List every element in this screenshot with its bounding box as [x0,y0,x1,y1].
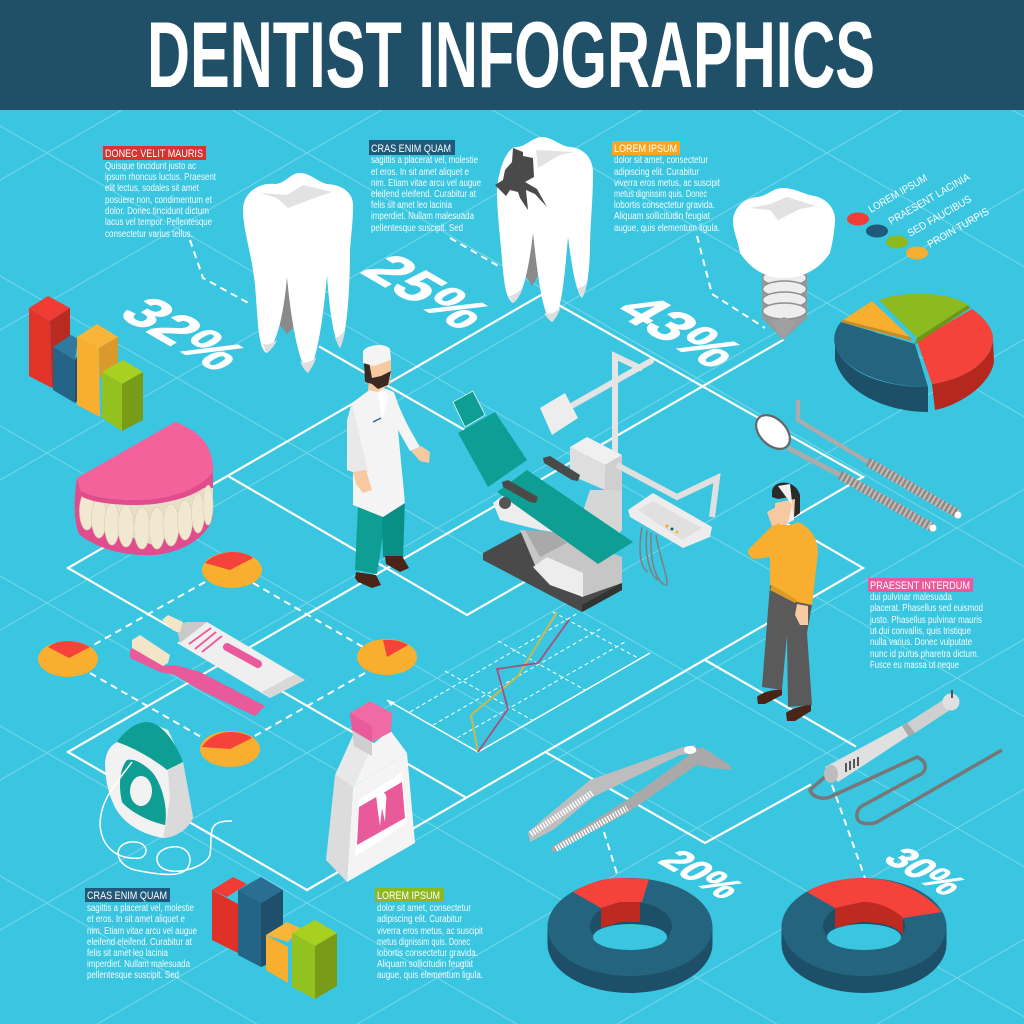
icon: dental chair [453,356,717,612]
text block: cras enim quam top: CRAS ENIM QUAM [371,143,451,155]
flowchart connector lines [68,295,863,890]
text block: donec velit mauris: DONEC VELIT MAURIS [105,148,203,160]
text block: donec velit mauris: Quisque tincidunt justo ac [105,161,196,172]
text block: lorem ipsum bottom: augue, quis elementum ligula. [377,970,483,981]
text block: donec velit mauris: lacus vel tempor. Pellentesque [105,217,212,228]
chart: bottom bars [212,877,337,999]
text block: lorem ipsum bottom: dolor sit amet, consectetur [377,903,472,914]
text block: praesent interdum: PRAESENT INTERDUM [870,580,970,592]
icon: dental floss [100,722,232,874]
text block: lorem ipsum bottom: LOREM IPSUM [377,890,440,902]
text block: cras enim quam top: imperdiet. Nullam malesuada [371,211,474,222]
lamp arm [573,356,651,455]
text block: lorem ipsum top: augue, quis elementum ligula. [614,223,720,234]
icon: toothpaste tube [162,615,305,698]
legend: pie chart keys: PRAESENT LACINIA [886,171,972,228]
text block: cras enim quam bottom: pellentesque suscipit. Sed [87,970,179,981]
icon: small pie top [202,552,262,588]
text block: cras enim quam top: sagittis a placerat vel, molestie [371,155,478,166]
icon: small pie bottom [200,731,260,767]
text block: cras enim quam top: pellentesque suscipit. Sed [371,223,463,234]
text block: lorem ipsum bottom: Aliquam sollicitudin feugiat [377,959,473,970]
legend: pie chart keys: PROIN TURPIS [926,206,991,251]
text block: lorem ipsum bottom [375,888,483,981]
text block: lorem ipsum bottom: metus dignissim quis. Donec [377,937,470,948]
chart: donut 30% [782,878,946,993]
text block: praesent interdum [868,578,983,671]
text block: cras enim quam bottom: eleifend eleifend. Curabitur at [87,937,192,948]
text block: lorem ipsum top [612,141,720,234]
stat: 43%: 43% [602,286,757,376]
icon: mouthwash bottle [326,701,415,882]
text block: lorem ipsum bottom: viverra eros metus, ac suscipit [377,926,483,937]
text block: praesent interdum: ut dui convallis, quis tristique [870,626,971,637]
dashed leader lines [90,236,865,878]
text block: cras enim quam bottom: CRAS ENIM QUAM [87,890,167,902]
icon: dental implant [733,188,835,340]
text block: praesent interdum: placerat. Phasellus sed euismod [870,603,983,614]
icon: dentist [347,345,430,588]
text block: cras enim quam top: nim. Etiam vitae arcu vel augue [371,178,481,189]
legend: pie chart keys [847,171,991,260]
text block: praesent interdum: Fusce eu massa ut neque [870,660,959,671]
icon: toothbrush [130,635,265,716]
text block: donec velit mauris: posuere non, condimentum et [105,195,212,206]
stat: 25%: 25% [348,246,505,338]
legend: pie chart keys: SED FAUCIBUS [906,193,974,240]
text block: cras enim quam top: eleifend eleifend. Curabitur at [371,189,476,200]
text block: cras enim quam bottom: sagittis a placerat vel, molestie [87,903,194,914]
text block: lorem ipsum bottom: lobortis consectetur gravida. [377,948,478,959]
chart: top left bars [29,296,143,431]
icon: dental probe [798,400,962,518]
chart: 3D pie [834,294,994,412]
text block: donec velit mauris: consectetur varius tellus. [105,229,193,240]
text block: praesent interdum: dui pulvinar malesuada [870,592,952,603]
text block: lorem ipsum top: lobortis consectetur gravida. [614,200,715,211]
text block: cras enim quam top [369,140,481,234]
text block: cras enim quam top: felis sit amet leo lacinia [371,200,452,211]
chart: small isometric line chart [387,612,650,752]
icon: extraction forceps [528,745,732,853]
text block: cras enim quam bottom: felis sit amet leo lacinia [87,948,168,959]
stat: 20%: 20% [649,844,753,905]
text block: lorem ipsum top: adipiscing elit. Curabitur [614,167,700,178]
text block: praesent interdum: nunc id purus pharetra dictum. [870,649,979,660]
text block: praesent interdum: justo. Phasellus pulvinar mauris [869,615,982,626]
icon: healthy tooth [243,173,353,373]
text block: lorem ipsum top: metus dignissim quis. Donec [614,189,707,200]
text block: donec velit mauris: elit lectus, sodales sit amet [105,183,199,194]
icon: small pie left [38,641,98,677]
text block: cras enim quam bottom: nim. Etiam vitae arcu vel augue [87,926,197,937]
text block: donec velit mauris [103,146,216,240]
text block: cras enim quam top: et eros. In sit amet aliquet e [371,167,469,178]
chart: donut 20% [548,878,712,993]
text block: lorem ipsum top: dolor sit amet, consectetur [614,155,709,166]
stat: 30%: 30% [874,842,976,901]
text block: lorem ipsum top: LOREM IPSUM [614,143,677,155]
text block: lorem ipsum bottom: adipiscing elit. Curabitur [377,914,463,925]
header band [0,0,1024,110]
icon: dentures [75,422,213,555]
instrument tray [617,465,717,586]
icon: patient with toothache [748,483,818,721]
text block: cras enim quam bottom [85,888,197,981]
lamp head [540,393,578,435]
icon: dental handpiece [810,690,1002,824]
icon: decayed tooth [495,137,593,322]
text block: cras enim quam bottom: imperdiet. Nullam malesuada [87,959,190,970]
instrument tower [570,437,622,545]
chair base [483,532,622,612]
icon: dental mirror [750,409,936,532]
icon: small pie right [357,639,417,675]
text block: lorem ipsum top: Aliquam sollicitudin feugiat [614,211,710,222]
text block: donec velit mauris: ipsum rhoncus luctus. Praesent [105,172,216,183]
text block: cras enim quam bottom: et eros. In sit amet aliquet e [87,914,185,925]
text block: donec velit mauris: dolor. Donec tincidunt dictum [105,206,209,217]
text block: praesent interdum: nulla varius. Donec vulputate [870,637,972,648]
stat: 32%: 32% [106,289,261,379]
armrests [502,456,580,503]
text block: lorem ipsum top: viverra eros metus, ac suscipit [614,178,720,189]
legend: pie chart keys: LOREM IPSUM [866,172,930,216]
backrest and seat [453,391,485,427]
